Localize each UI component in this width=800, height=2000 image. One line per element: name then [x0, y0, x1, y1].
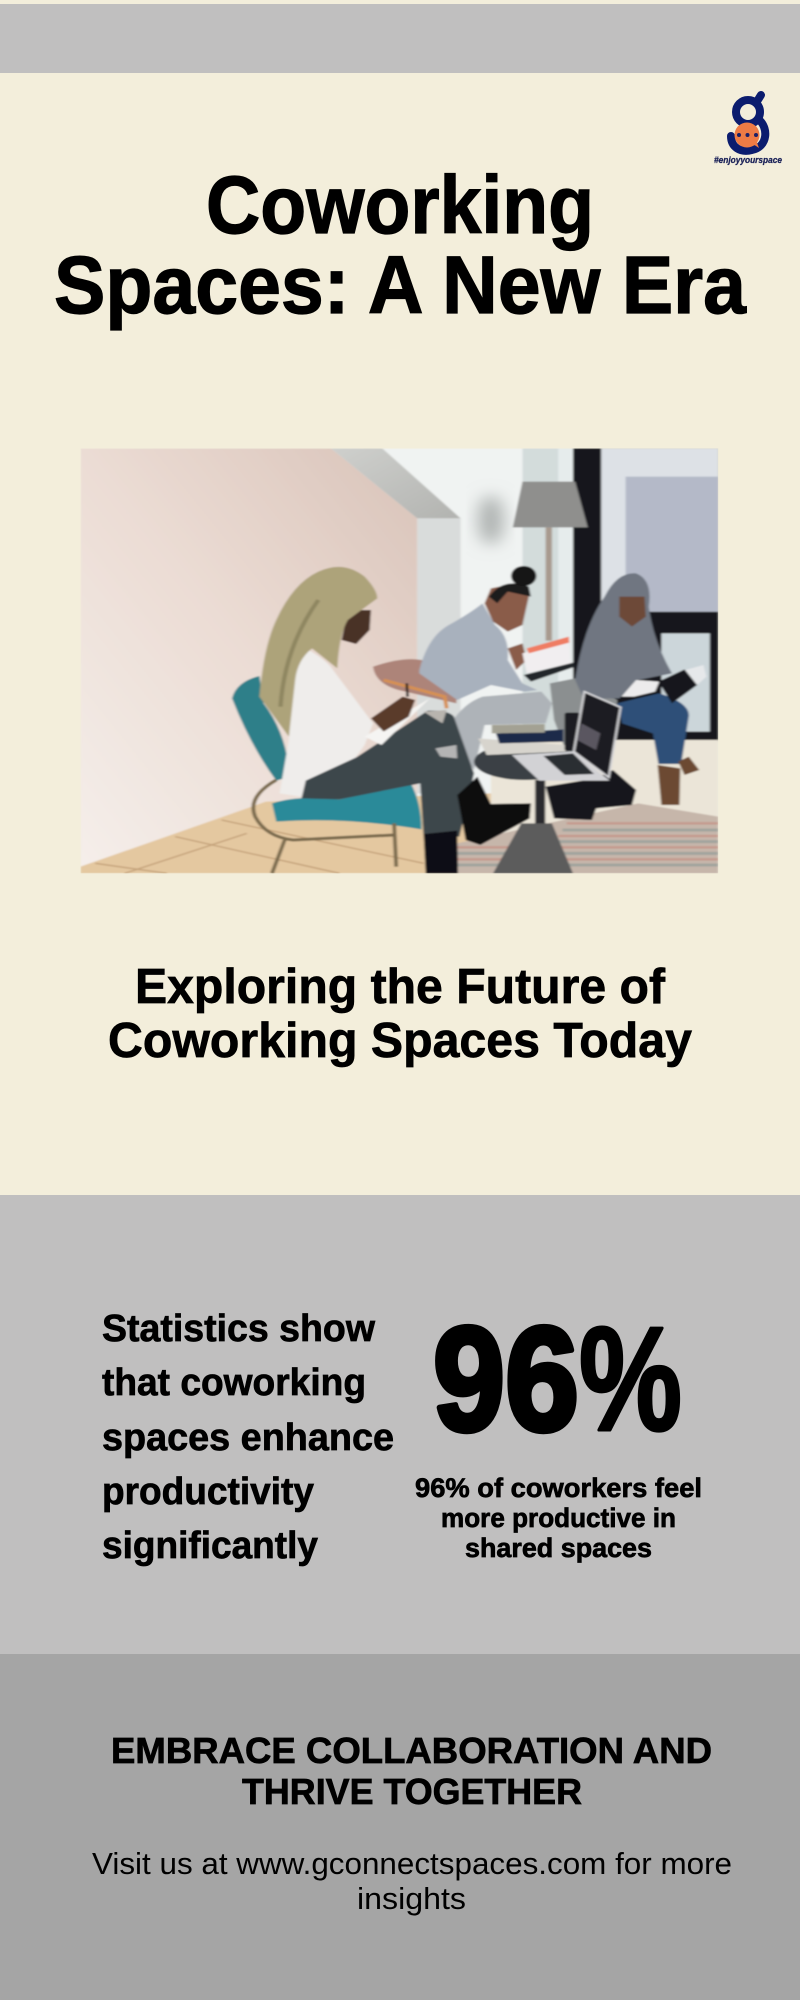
statement text: that coworking [102, 1362, 366, 1404]
grey armchair behind the right woman [550, 678, 617, 753]
far wall [383, 448, 718, 806]
backpacks [546, 770, 636, 820]
laptop [512, 692, 621, 781]
stat caption: more productive in [441, 1503, 676, 1533]
wooden floor with planks [81, 740, 718, 873]
subtitle [108, 960, 692, 1068]
call to action heading [111, 1730, 712, 1812]
photo: three people working in a coworking lounge [81, 448, 718, 873]
coffee table with books [474, 713, 580, 873]
panel: call to action [0, 1654, 800, 2000]
big number: 9 [433, 1297, 505, 1462]
statement text: spaces enhance [102, 1417, 394, 1459]
statement text: Statistics show [102, 1308, 375, 1350]
subtitle: Exploring the Future of [135, 960, 666, 1014]
panel background [0, 1195, 800, 1654]
top grey band [0, 4, 800, 73]
stat caption: 96% of coworkers feel [415, 1473, 702, 1503]
pink armchair [373, 659, 457, 708]
stat caption: shared spaces [465, 1533, 652, 1563]
big number: % [579, 1297, 682, 1462]
soffit and return wall [331, 448, 461, 793]
logo [714, 95, 783, 166]
logo chat bubble [734, 122, 760, 148]
woman in grey hijab [575, 573, 706, 805]
pink wall [81, 448, 417, 867]
title [54, 160, 747, 331]
title: Spaces: A New Era [54, 240, 747, 331]
big number [433, 1297, 682, 1462]
big number: 6 [505, 1297, 579, 1462]
call to action heading: THRIVE TOGETHER [242, 1771, 582, 1812]
website note: insights [357, 1881, 466, 1916]
window [573, 448, 718, 742]
panel: statistics [0, 1195, 800, 1654]
woman writing: teal chair [232, 676, 421, 873]
woman writing: notebook and hands [365, 683, 430, 745]
logo hashtag: #enjoyyourspace [714, 155, 783, 166]
statement text [102, 1308, 394, 1567]
title: Coworking [206, 160, 594, 251]
subtitle: Coworking Spaces Today [108, 1014, 692, 1068]
stat caption [415, 1473, 702, 1563]
logo mark: g letter [731, 95, 765, 151]
statement text: productivity [102, 1471, 314, 1513]
statement text: significantly [102, 1525, 318, 1567]
website note [92, 1846, 732, 1916]
woman writing: hijab and face [259, 567, 377, 737]
paper and tablet [522, 637, 575, 682]
striped rug [457, 803, 718, 873]
man in grey sweater [419, 566, 552, 770]
floor lamp [513, 482, 588, 641]
website note: Visit us at www.gconnectspaces.com for more [92, 1846, 732, 1881]
call to action heading: EMBRACE COLLABORATION AND [111, 1730, 712, 1771]
panel background [0, 1654, 800, 2000]
woman writing: shirt, jeans, boots [280, 648, 531, 873]
